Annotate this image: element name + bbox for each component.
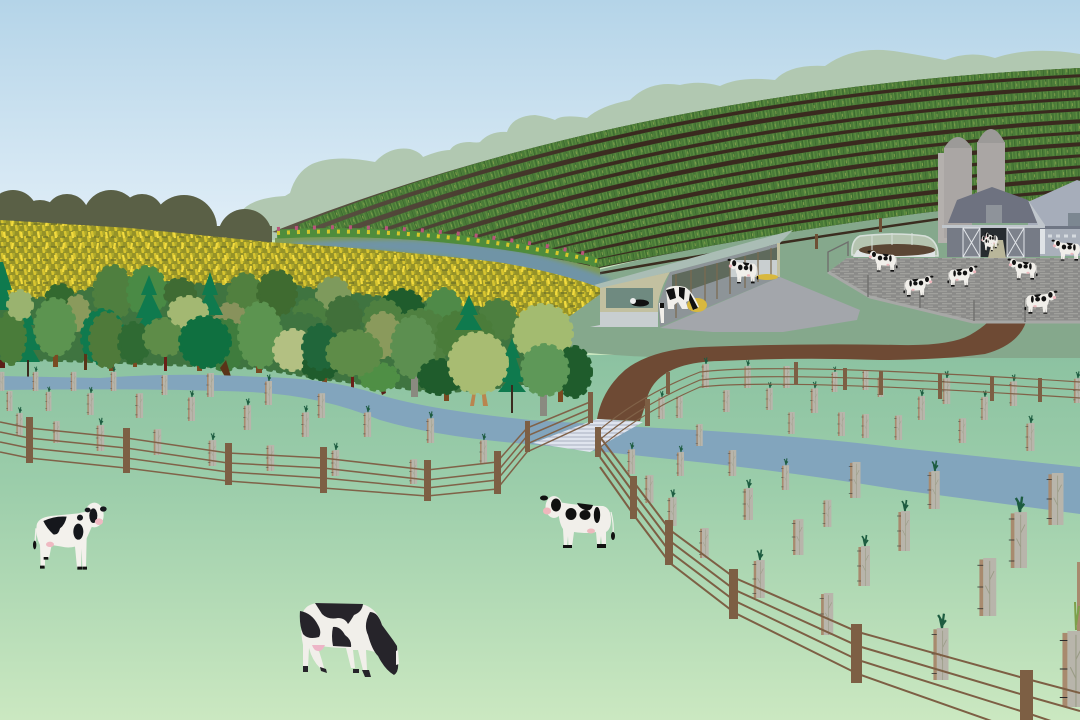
contour crop field on hill — [270, 60, 1080, 280]
barn roof — [948, 187, 1038, 223]
side door — [1040, 229, 1045, 254]
shed window — [606, 288, 653, 308]
shed back wall — [730, 260, 780, 277]
cow body — [301, 603, 398, 670]
round manure tank — [852, 233, 938, 257]
barn doors — [963, 228, 1024, 257]
wood posts near field — [815, 218, 882, 249]
sage meadow behind farm — [560, 190, 1080, 358]
front row trunks — [0, 345, 563, 416]
sky — [0, 0, 1080, 240]
fence wires — [0, 402, 590, 496]
grass under flower strip — [275, 237, 600, 285]
cow spots — [43, 517, 67, 535]
tree belt backing mass — [0, 280, 575, 392]
front row trees — [0, 291, 591, 397]
upper fence posts — [645, 362, 1042, 426]
tree belt — [0, 262, 591, 416]
cows in shed — [630, 259, 758, 323]
fence posts — [26, 392, 593, 501]
main barn — [942, 187, 1045, 258]
cow hooves — [40, 557, 87, 570]
corn field — [0, 220, 606, 335]
cow tail — [33, 528, 38, 543]
field soil edge — [590, 200, 1080, 275]
pond — [292, 240, 612, 290]
far seedling tree guards — [0, 357, 1080, 484]
second barn — [1028, 180, 1080, 256]
shed posts — [676, 248, 771, 318]
barn eave — [1028, 200, 1045, 225]
right field fence — [595, 362, 1080, 720]
cow muzzle blaze — [396, 650, 399, 665]
barn doorway — [980, 228, 1007, 257]
near seedling tree guards — [627, 442, 1080, 707]
open-sided cow shed — [590, 230, 793, 327]
cow standing left — [33, 503, 107, 570]
shed gable wall — [600, 272, 670, 312]
lower fence posts — [595, 427, 1033, 720]
cow udder — [46, 542, 54, 547]
distant sage hills — [240, 50, 1080, 240]
silos — [938, 129, 1005, 243]
shed interior dark wall — [672, 247, 778, 296]
concrete apron — [660, 277, 860, 332]
pasture background — [0, 355, 1080, 720]
shed base wall — [590, 312, 658, 327]
left pasture fence — [0, 392, 593, 501]
cow standing by bridge — [540, 496, 615, 548]
loft door — [986, 205, 1002, 223]
back row trees — [46, 266, 517, 370]
shed roof — [594, 230, 793, 288]
shed interior — [658, 243, 780, 327]
cow body and legs — [36, 512, 93, 568]
concrete cow yard — [828, 242, 1080, 322]
spruce trees — [0, 262, 526, 392]
dirt cow track — [597, 322, 1026, 421]
flower strip — [277, 227, 597, 262]
footbridge — [533, 419, 643, 452]
grazing cow — [300, 603, 399, 677]
stream — [0, 375, 1080, 514]
cows in doorway — [981, 232, 998, 251]
upper fence wires — [597, 369, 1080, 450]
lower fence wires — [600, 437, 1080, 720]
cow spots — [300, 603, 398, 677]
straw — [687, 274, 778, 312]
distant dark tree line — [0, 190, 272, 263]
barn ramp — [988, 240, 1006, 258]
cow udder — [312, 645, 325, 651]
cow head — [85, 503, 104, 527]
cows in yard — [868, 240, 1080, 314]
